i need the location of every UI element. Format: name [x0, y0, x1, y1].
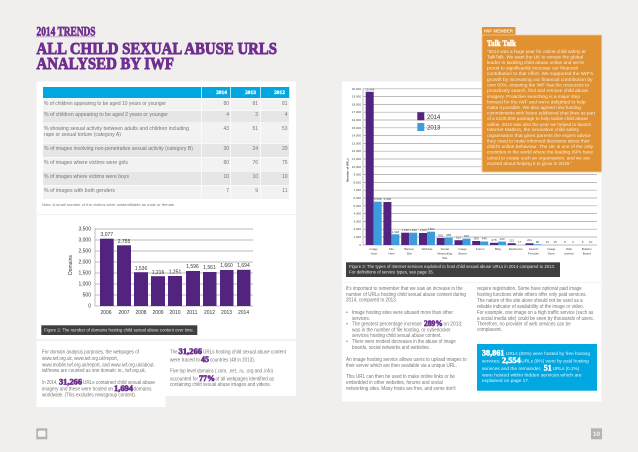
- bar chart: site types: Site: [407, 252, 412, 256]
- bar chart: domains by year: 2014: [238, 310, 249, 316]
- callout: hosting statistics: explained on page 17.: [482, 378, 529, 384]
- panel: domain text right: URLs hosting child sexual abuse content: [203, 350, 287, 356]
- bar chart: site types: 1,536: [401, 228, 409, 232]
- table rows: [43, 98, 289, 199]
- bar chart: domains by year: 3,000: [78, 238, 91, 244]
- panel: domain text right: Five top level domains (.com, .net, .ru, .org and .info): [170, 369, 273, 375]
- bar chart: site types: Website: [422, 247, 433, 251]
- text block: image hosting left column: [346, 286, 467, 392]
- text block: image hosting left column: was in the number of file hosting, or cyberlocker: [352, 327, 451, 333]
- bar chart: site types: 4,000: [353, 212, 361, 216]
- panel: sponsor quote TalkTalk: Talk Talk: [487, 38, 516, 48]
- bar chart: domains by year: 0: [88, 304, 91, 310]
- panel: sponsor quote TalkTalk: proud to significantly increase our financial: [487, 66, 578, 71]
- callout: hosting statistics: 2,554: [502, 356, 521, 365]
- bar chart: site types: Bulletin: [582, 247, 592, 251]
- bar chart: site types: Forum: [476, 247, 485, 251]
- bar chart: domains by year: 1,561: [203, 265, 216, 271]
- text block: image hosting right column: Therefore, no provider of web services can be: [477, 321, 571, 327]
- panel: domain text left: www.mobile.iwf.org.uk/report, and www.iwf.org.uk/about-: [42, 362, 155, 368]
- bar chart: domains by year: Domains: [68, 255, 74, 275]
- bar chart: site types: 1,526: [419, 228, 427, 232]
- callout: hosting statistics: were hosted within hidden services which are: [482, 372, 582, 378]
- bar chart: site types: Image: [370, 247, 378, 251]
- callout: hosting statistics: 38,861: [482, 348, 504, 358]
- table rows: 80: [223, 160, 229, 166]
- table note: Note: A small number of the victims were unidentifiable as male or female: [42, 203, 174, 207]
- chart legend: 2014: [427, 115, 441, 121]
- panel: sponsor quote TalkTalk: TalkTalk. We want the UK to remain the global: [487, 55, 583, 60]
- callout: hosting statistics: services and the remainder,: [482, 366, 541, 372]
- bar chart: site types: Banner: [404, 247, 414, 251]
- table rows: % of images where victims were girls: [44, 160, 129, 166]
- bar chart: site types: [346, 87, 597, 260]
- callout: hosting statistics: URLs (0.2%): [553, 366, 580, 372]
- text block: image hosting left column: embedded in other websites, forums and social: [346, 380, 443, 386]
- bar chart: domains by year: 2006: [100, 310, 112, 316]
- table rows: 81: [252, 101, 258, 107]
- bar chart: site types: Board: [458, 252, 467, 256]
- bar chart: site types: 2,000: [353, 227, 361, 231]
- table rows: 7: [226, 188, 229, 194]
- heading: section label: 2014 TRENDS: [36, 24, 96, 38]
- bar chart: domains by year: 2,755: [118, 239, 130, 245]
- text block: image hosting right column: a social media site) could be seen by thousands of users.: [477, 316, 594, 322]
- bar chart: domains by year: 1,000: [78, 282, 91, 288]
- panel: sponsor quote TalkTalk: contribution to that effort. We supported the IWF's: [487, 71, 594, 76]
- bar chart: site types: 1,348: [392, 230, 399, 234]
- table header: 2013: [245, 90, 256, 96]
- chart legend: 2013: [427, 126, 441, 132]
- bar chart: site types: 891: [438, 234, 444, 238]
- table header: 2014: [216, 90, 227, 96]
- text block: image hosting left column: services hosting child sexual abuse content.: [352, 333, 442, 339]
- text block: image hosting left column: their server which are then available via a unique URL.: [346, 363, 457, 369]
- bar chart: site types: 6,000: [353, 196, 361, 200]
- text block: image hosting left column: An image hosting service allows users to upload images to: [346, 357, 467, 363]
- bar chart: site types: 5: [582, 240, 584, 244]
- panel: trends table: [36, 81, 296, 214]
- text block: image hosting left column: The greatest percentage increase: [352, 321, 422, 327]
- bar chart: domains by year: 2011: [187, 310, 198, 316]
- bar chart: domains by year: 2008: [135, 310, 147, 316]
- table header: [43, 87, 289, 98]
- bar chart: site types: 14,000: [352, 134, 361, 138]
- bar chart: domains by year: 2013: [221, 310, 232, 316]
- bar chart: site types: Networking: [437, 252, 453, 256]
- panel: domain text right: 31,266: [178, 347, 202, 356]
- text block: image hosting left column: There were modest decreases in the abuse of image: [352, 339, 456, 345]
- bar chart: site types: 17,000: [352, 110, 361, 114]
- bar chart: site types: 9,000: [353, 173, 361, 177]
- table rows: 3: [255, 112, 258, 118]
- bar chart: domains by year: 1,694: [237, 263, 250, 269]
- bar chart: site types: 17: [518, 240, 522, 244]
- text block: image hosting left column: networking sites. Many hosts are free, and some don't: [346, 386, 456, 392]
- bar chart: site types: Provider: [528, 252, 539, 256]
- table rows: % of images with both genders: [44, 188, 116, 194]
- table rows: % of images involving non-penetrative sexual activity (category B): [44, 146, 193, 152]
- text block: image hosting left column: •: [346, 321, 348, 327]
- text block: image hosting left column: number of URLs hosting child sexual abuse content during: [346, 292, 466, 298]
- bar chart: site types: 278: [491, 238, 497, 242]
- table rows: 11: [282, 188, 288, 194]
- panel: domain text right: The: [170, 350, 178, 356]
- panel: domain text right: 77%: [199, 374, 215, 383]
- text block: image hosting left column: It's important to remember that we saw an increase in the: [346, 286, 463, 292]
- table rows: % of children appearing to be aged 10 years or younger: [44, 101, 166, 107]
- bar chart: site types: 445: [482, 236, 487, 240]
- bar chart: domains by year: 3,077: [101, 232, 113, 238]
- panel: sponsor quote TalkTalk: over 60%, ensuring the IWF has the resources to: [487, 82, 589, 88]
- bar chart: site types: Social: [441, 247, 449, 251]
- bar chart: site types: 10,000: [352, 165, 361, 169]
- panel: domain text left: imagery and these were hosted on: [42, 387, 113, 393]
- panel: sponsor quote TalkTalk: imagery. Proactive searching is a major step: [487, 94, 580, 99]
- bar chart: site types: 211: [527, 238, 532, 242]
- bar chart: domains by year: 2009: [152, 310, 164, 316]
- text block: image hosting right column: [477, 286, 594, 333]
- panel: sponsor quote TalkTalk: [482, 27, 602, 172]
- bar chart: site types: 11,000: [352, 157, 361, 161]
- text block: image hosting left column: This URL can then be used to make online links or be: [346, 374, 455, 380]
- panel: domain text right: countries (48 in 2013).: [210, 357, 255, 363]
- bar chart: site types: Host: [371, 252, 377, 256]
- table rows: 51: [252, 126, 258, 132]
- text block: image hosting right column: require registration. Some have optional paid image: [477, 286, 582, 292]
- table rows: 4: [226, 112, 229, 118]
- title: [36, 39, 277, 73]
- chart legend: [417, 112, 441, 132]
- text block: image hosting left column: 289%: [424, 319, 443, 328]
- table rows: 10: [252, 174, 258, 180]
- text block: image hosting left column: on 2013;: [444, 321, 462, 327]
- table rows: 80: [223, 101, 229, 107]
- bar chart: domains by year: 1,500: [78, 271, 91, 277]
- panel: sponsor quote TalkTalk: proactively search, find and remove child abuse: [487, 88, 588, 93]
- bar chart: site types: 19,648: [365, 88, 375, 92]
- panel: domain text left: iwf/news are counted as one domain: ie., iwf.org.uk.: [42, 368, 146, 374]
- table rows: 81: [282, 101, 288, 107]
- table rows: 53: [282, 126, 288, 132]
- bar chart: domains by year: 1,660: [220, 263, 233, 269]
- table rows: 10: [282, 174, 288, 180]
- bar chart: site types: 221: [509, 239, 515, 243]
- callout: hosting statistics: services;: [482, 359, 500, 365]
- text block: image hosting right column: hosting functions while others offer only paid services.: [477, 292, 587, 298]
- bar chart: domains by year: 3,500: [78, 227, 91, 233]
- bar chart: site types: Blog: [495, 247, 501, 251]
- panel: domain text left: 31,266: [59, 378, 82, 386]
- bar chart: site types: 5,558: [374, 197, 382, 201]
- icon: right page number: [591, 428, 602, 439]
- bar chart: domains by year: 1,251: [169, 270, 181, 276]
- table rows: 30: [223, 146, 229, 152]
- table rows: 10: [223, 174, 229, 180]
- bar chart: domains by year: 500: [83, 293, 91, 299]
- panel: domain text left: In 2014,: [42, 380, 58, 386]
- caption: figure 2: [41, 325, 197, 335]
- panel: sponsor quote TalkTalk: leader in tackling child abuse online and we're: [487, 60, 584, 65]
- callout: hosting statistics: [477, 344, 597, 391]
- bar chart: site types: Store: [548, 252, 555, 256]
- bar chart: site types: Image: [458, 247, 467, 251]
- icon: left page number: [36, 428, 47, 439]
- text block: image hosting left column: services.: [352, 316, 370, 322]
- bar chart: site types: 1,000: [353, 235, 361, 239]
- bar chart: site types: 5,500: [384, 197, 391, 201]
- title: ALL CHILD SEXUAL ABUSE URLS: [36, 39, 277, 58]
- bar chart: site types: 13,000: [352, 141, 361, 145]
- panel: domain text left: domains: [134, 387, 152, 393]
- panel: sponsor quote TalkTalk: Internet Matters, the innovative child safety: [487, 127, 580, 132]
- panel: domain text right: 45: [201, 355, 209, 364]
- callout: hosting statistics: URLs (8%) were by paid hosting: [521, 359, 589, 365]
- table rows: % of images where victims were boys: [44, 174, 129, 180]
- bar chart: site types: 20,000: [352, 87, 361, 91]
- panel: domains bar chart: [36, 215, 296, 339]
- bar chart: site types: Host: [388, 252, 395, 256]
- bar chart: site types: 509: [474, 236, 479, 240]
- panel: sponsor quote TalkTalk: countries in the world where the leading ISPs have: [487, 150, 593, 154]
- table rows: rape or sexual torture (category A): [44, 132, 121, 138]
- panel: sponsor quote TalkTalk: they need to make informed decisions about their: [487, 139, 590, 144]
- caption: figure 3: Figure 3: The types of Internet services exploited to host child sexual abuse URLs in 2014 compared to 2013.: [349, 264, 555, 269]
- panel: sponsor quote TalkTalk: IWF MEMBER: [484, 28, 514, 34]
- table rows: 43: [223, 126, 229, 132]
- bar chart: domains by year: 2007: [118, 310, 130, 316]
- panel: domain text right: of all webpages identified as: [216, 377, 274, 383]
- bar chart: domains by year: 2012: [204, 310, 215, 316]
- bar chart: site types: Search: [529, 247, 539, 251]
- bar chart: site types: 18,000: [352, 102, 361, 106]
- bar chart: site types: 13: [546, 240, 549, 244]
- bar chart: domains by year: 2010: [169, 310, 181, 316]
- bar chart: site types: 16,000: [352, 118, 361, 122]
- bar chart: domains by year: [68, 227, 253, 316]
- bar chart: site types: Web: [566, 247, 572, 251]
- bar chart: site types: 3: [572, 240, 574, 244]
- bar chart: domains by year: 1,536: [135, 266, 147, 272]
- table rows: 4: [285, 112, 288, 118]
- bar chart: site types: 10: [589, 240, 593, 244]
- text block: image hosting right column: The nature of the site alone should not be used as a: [477, 298, 583, 304]
- bar chart: domains by year: 1,596: [186, 264, 199, 270]
- bar chart: site types: 12,000: [352, 149, 361, 153]
- bar chart: site types: 86: [536, 240, 539, 244]
- bar chart: site types: 433: [499, 237, 505, 241]
- table rows: 24: [252, 146, 258, 152]
- panel: sponsor quote TalkTalk: united to create such an organisation, and we are: [487, 156, 590, 160]
- bar chart: site types: 1,601: [427, 227, 435, 231]
- caption: figure 3: [346, 262, 560, 277]
- panel: domain text left: [36, 341, 166, 407]
- panel: domain text right: containing child sexual abuse images and videos.: [170, 382, 271, 388]
- text block: image hosting left column: 2014, compared to 2013.: [346, 298, 397, 304]
- table rows: 20: [282, 146, 288, 152]
- bar chart: site types: Site: [442, 256, 448, 260]
- bar chart: domains by year: 2,000: [78, 260, 91, 266]
- bar chart: site types: 5,000: [353, 204, 361, 208]
- panel: domain text left: 1,694: [114, 384, 133, 393]
- caption: figure 3: For definitions of service types, see page 35.: [349, 270, 434, 275]
- panel: sponsor quote TalkTalk: make it possible. We also agreed new funding: [487, 105, 581, 110]
- panel: domain text right: accounted for: [170, 377, 198, 383]
- bar chart: site types: 8,000: [353, 180, 361, 184]
- panel: sponsor quote TalkTalk: growth by increasing our financial contribution by: [487, 77, 593, 82]
- table rows: 76: [252, 160, 258, 166]
- bar chart: site types: 3,000: [353, 219, 361, 223]
- bar chart: domains by year: 2,500: [78, 249, 91, 255]
- callout: hosting statistics: 51: [544, 364, 552, 372]
- table rows: % of children appearing to be aged 2 years or younger: [44, 112, 168, 118]
- table rows: 75: [282, 160, 288, 166]
- bar chart: domains by year: 1,216: [152, 270, 164, 276]
- icon: right page number: 10: [593, 431, 600, 438]
- bar chart: site types: 15: [554, 240, 557, 244]
- caption: figure 2: Figure 2: The number of domains hosting child sexual abuse content over time.: [44, 328, 194, 333]
- bar chart: site types: 0: [359, 243, 361, 247]
- bar chart: site types: 612: [456, 236, 461, 240]
- panel: sponsor quote TalkTalk: commitments with future additional chat lines as part: [487, 110, 596, 116]
- bar chart: site types: 8: [564, 240, 566, 244]
- panel: sponsor quote TalkTalk: of a £100,000 package to help tackle child abuse: [487, 116, 588, 121]
- table rows: 9: [255, 188, 258, 194]
- table rows: % showing sexual activity between adults and children including: [44, 126, 189, 132]
- panel: domain text right: [166, 341, 296, 396]
- bar chart: site types: Redirector: [509, 247, 523, 251]
- bar chart: site types: Number of URLs: [346, 158, 350, 182]
- bar chart: site types: 1,540: [409, 228, 417, 232]
- text block: image hosting left column: boards, social networks and websites.: [352, 345, 430, 351]
- callout: hosting statistics: URLs (83%) were hosted by free hosting: [506, 351, 590, 357]
- text block: image hosting left column: Image hosting sites were abused more than other: [352, 310, 453, 316]
- bar chart: site types: 7,000: [353, 188, 361, 192]
- bar chart: site types: 15,000: [352, 126, 361, 130]
- text block: image hosting right column: For example, one image on a high traffic service (such as: [477, 310, 594, 316]
- text block: image hosting left column: •: [346, 339, 348, 345]
- bar chart: site types: Image: [547, 247, 556, 251]
- panel: site types chart: [342, 81, 602, 401]
- bar chart: site types: Board: [583, 252, 591, 256]
- panel: domain text left: For domain analysis purposes, the webpages of: [42, 350, 140, 356]
- panel: domain text right: were traced to: [170, 357, 200, 363]
- panel: sponsor quote TalkTalk: online. 2014 was also the year we helped to launch: [487, 122, 591, 127]
- panel: domain text left: www.iwf.org.uk, www.iwf.org.uk/report,: [42, 356, 118, 362]
- bar chart: site types: 955: [446, 233, 452, 237]
- text block: image hosting left column: •: [346, 310, 348, 316]
- table header: 2012: [274, 90, 285, 96]
- panel: domain text left: worldwide. (This excludes newsgroup content).: [42, 393, 136, 399]
- bar chart: site types: File: [389, 247, 394, 251]
- panel: sponsor quote TalkTalk: child's online behaviour. The UK is one of the only: [487, 144, 594, 149]
- panel: sponsor quote TalkTalk: organisation that gives parents the expert advice: [487, 133, 591, 138]
- bar chart: site types: archive: [564, 252, 574, 256]
- text block: image hosting right column: complacent.: [477, 327, 502, 333]
- panel: sponsor quote TalkTalk: excited about helping it to grow in 2015.”: [487, 161, 572, 166]
- title: ANALYSED BY IWF: [36, 54, 174, 73]
- panel: domain text left: URLs contained child sexual abuse: [83, 380, 155, 386]
- bar chart: site types: 19,000: [352, 95, 361, 99]
- panel: sponsor quote TalkTalk: “2014 was a huge year for online child safety at: [487, 49, 586, 54]
- text block: image hosting right column: reliable indicator of availability of the image or video.: [477, 304, 584, 310]
- bar chart: site types: 818: [464, 234, 469, 238]
- panel: sponsor quote TalkTalk: forward for the IWF and we're delighted to help: [487, 100, 586, 104]
